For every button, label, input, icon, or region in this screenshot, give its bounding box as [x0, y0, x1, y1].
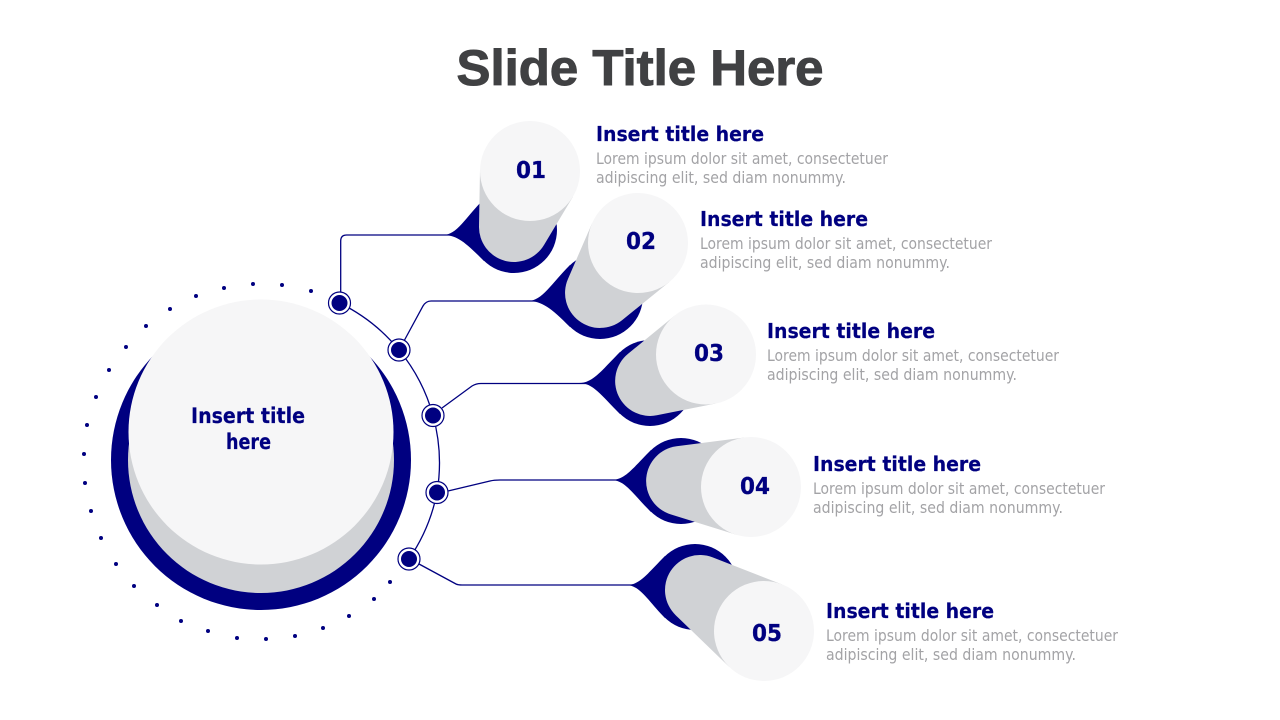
item 02 text — [700, 207, 992, 272]
item 03 text — [767, 319, 1059, 384]
item 03 text: Insert title here — [767, 319, 935, 343]
item 05 text: Lorem ipsum dolor sit amet, consectetuer — [826, 626, 1118, 645]
connector lines — [341, 235, 638, 585]
connector nodes — [328, 292, 448, 570]
item 04 text — [813, 452, 1105, 517]
number 03: 03 — [694, 341, 724, 367]
number 02: 02 — [626, 229, 656, 255]
item 02 — [528, 193, 688, 339]
item 05 text: adipiscing elit, sed diam nonummy. — [826, 645, 1076, 664]
item 04 text: Insert title here — [813, 452, 981, 476]
item 05 text: Insert title here — [826, 599, 994, 623]
item 02 text: Lorem ipsum dolor sit amet, consectetuer — [700, 234, 992, 253]
item 01 text: adipiscing elit, sed diam nonummy. — [596, 168, 846, 187]
connector arc — [340, 303, 439, 559]
item 02 text: Insert title here — [700, 207, 868, 231]
item 03 text: Lorem ipsum dolor sit amet, consectetuer — [767, 346, 1059, 365]
number 04: 04 — [740, 474, 770, 500]
central circle label: here — [226, 430, 271, 454]
item 04 — [611, 437, 801, 537]
item 03 text: adipiscing elit, sed diam nonummy. — [767, 365, 1017, 384]
item 05 — [626, 544, 814, 681]
central circle — [111, 300, 411, 610]
item 04 text: Lorem ipsum dolor sit amet, consectetuer — [813, 479, 1105, 498]
item 02 text: adipiscing elit, sed diam nonummy. — [700, 253, 950, 272]
item 01 — [443, 121, 580, 273]
number 01: 01 — [516, 158, 546, 184]
number 05: 05 — [752, 621, 782, 647]
item 01 text: Insert title here — [596, 122, 764, 146]
title: Slide Title Here — [456, 40, 824, 96]
item 04 text: adipiscing elit, sed diam nonummy. — [813, 498, 1063, 517]
central circle label: Insert title — [191, 404, 305, 428]
item 01 text — [596, 122, 888, 187]
item 03 — [579, 304, 756, 426]
item 05 text — [826, 599, 1118, 664]
dotted ring around central circle — [82, 282, 392, 641]
item 01 text: Lorem ipsum dolor sit amet, consectetuer — [596, 149, 888, 168]
